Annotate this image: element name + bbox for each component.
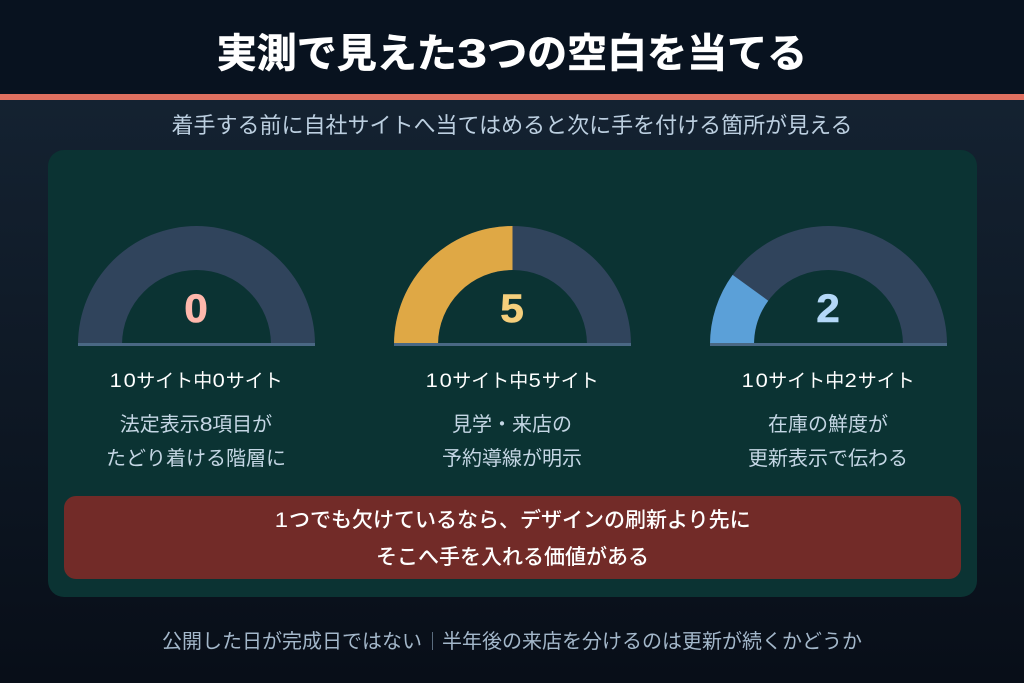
callout [64,496,961,579]
description 2: 予約導線が明示 [442,448,582,470]
count label 3: 0 [755,371,768,392]
title: 実測で見えた つの空白を当てる [217,32,807,76]
description 1: 8 [200,414,212,436]
count label 2: サイト中 サイト [452,371,599,392]
description 2: 見学・来店の [452,414,572,436]
description 1: 法定表示 項目が [120,414,272,436]
callout: 1 [275,509,288,532]
description 3: 在庫の鮮度が [768,414,888,436]
count label 3: 2 [845,371,857,392]
accent rule [0,94,1024,100]
gauge number 0: 0 [184,287,208,331]
gauge number 2: 2 [816,287,840,331]
description 2 [442,414,582,470]
panel: gauges [48,150,977,597]
subtitle: 着手する前に自社サイトへ当てはめると次に手を付ける箇所が見える [172,113,852,138]
description 1 [106,414,286,470]
callout: つでも欠けているなら、デザインの刷新より先に [289,509,751,532]
description 1: たどり着ける階層に [106,448,286,470]
count label 2: 5 [529,371,541,392]
count label 1: 0 [213,371,225,392]
gauge: 0 of 10 [78,226,315,346]
description 3 [748,414,908,470]
callout: そこへ手を入れる価値がある [376,546,649,569]
count label 1: サイト中 サイト [136,371,283,392]
gauge: 5 of 10 [394,226,631,346]
title: 3 [457,32,487,76]
gauge number 5: 5 [500,287,524,331]
header band [0,0,1024,94]
count label 1: 0 [123,371,136,392]
count label 2: 1 [426,371,438,392]
description 3: 更新表示で伝わる [748,448,908,470]
footer note: 公開した日が完成日ではない 半年後の来店を分けるのは更新が続くかどうか [162,631,862,653]
count label 3: サイト中 サイト [768,371,915,392]
gauge: 2 of 10 [710,226,947,346]
count label 2: 0 [439,371,452,392]
count label 1: 1 [110,371,122,392]
count label 3: 1 [742,371,754,392]
